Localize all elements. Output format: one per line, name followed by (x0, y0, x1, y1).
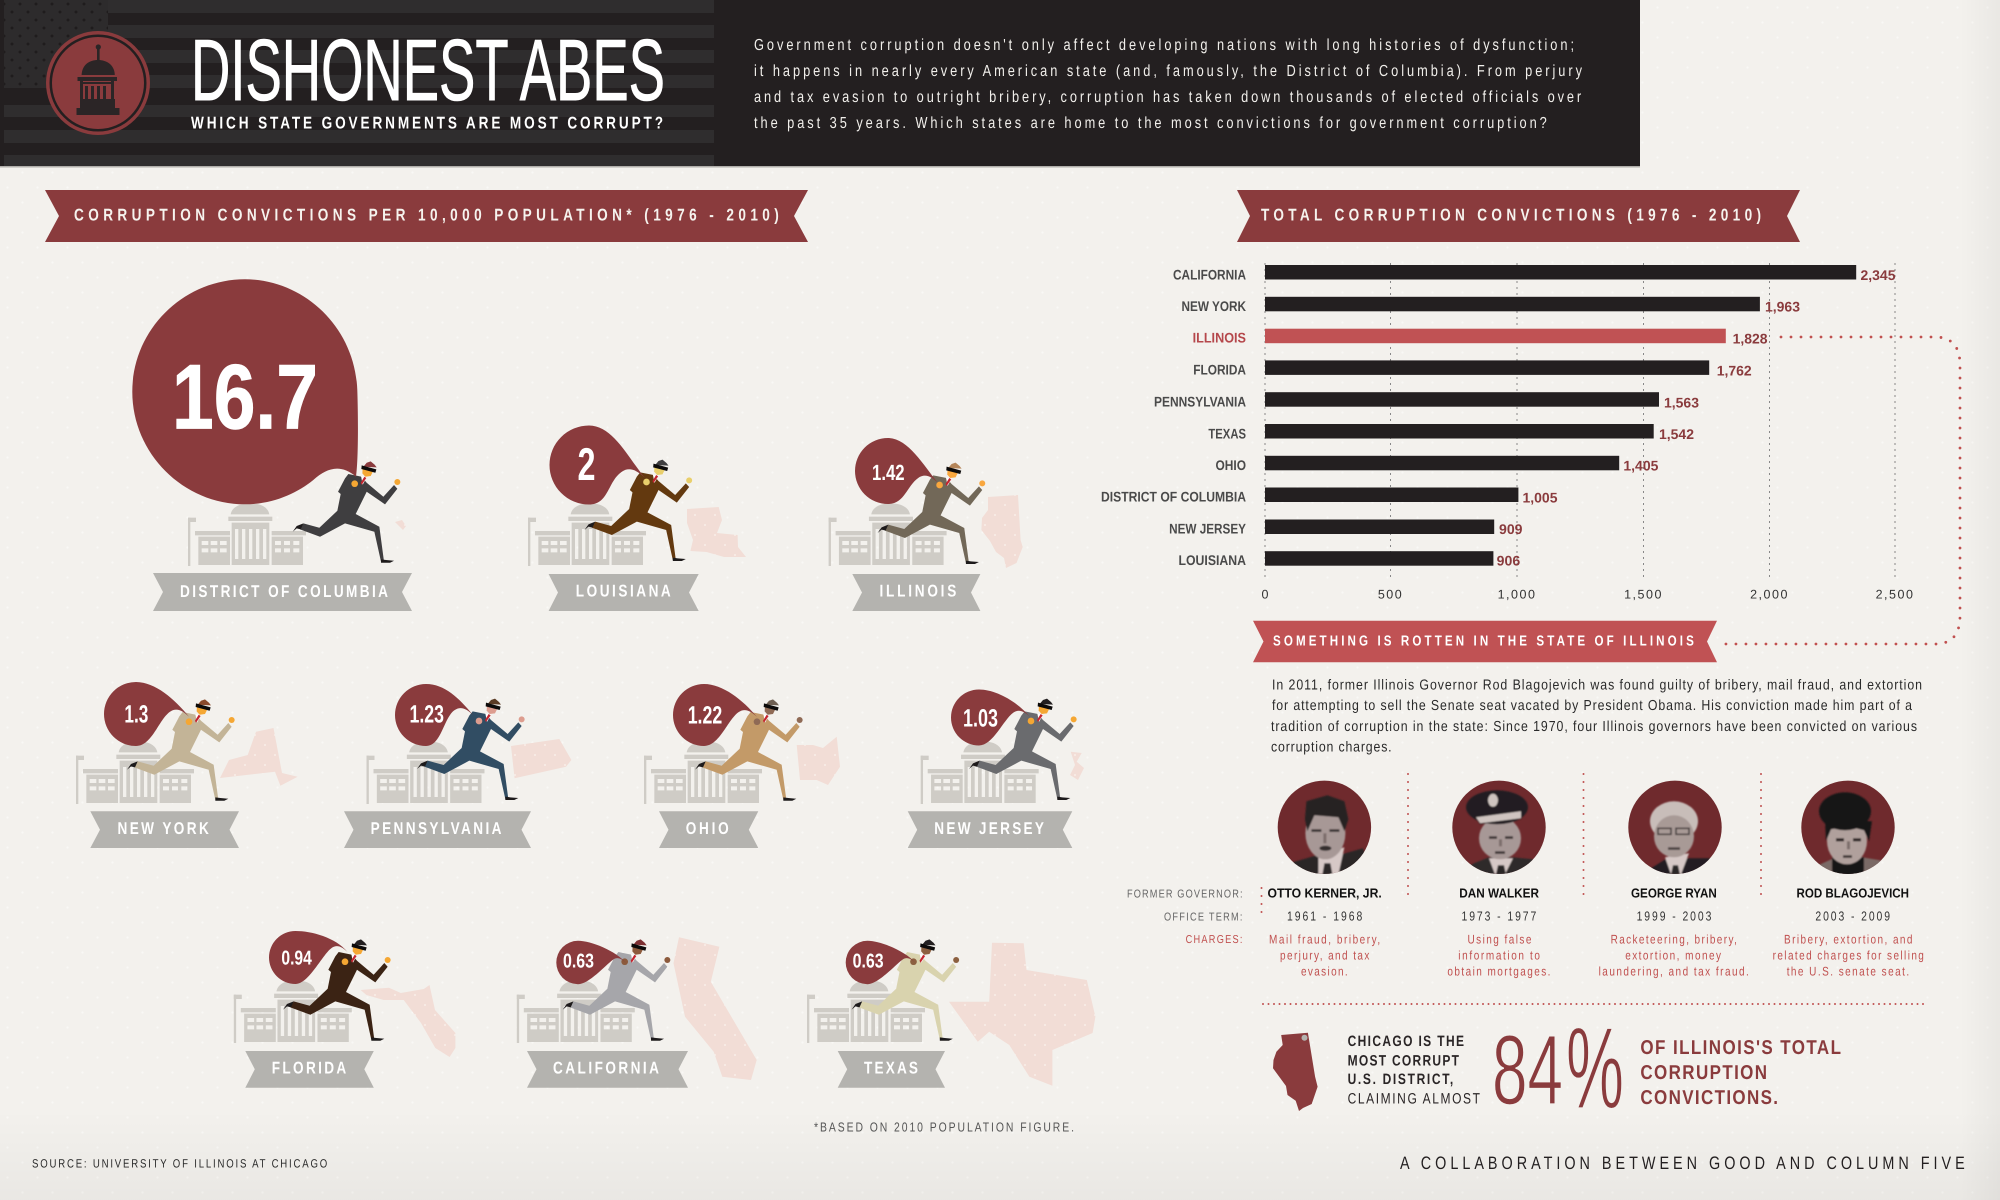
runner (293, 461, 400, 563)
money bag: 16.7 (132, 279, 358, 504)
money bag: 0.63 (846, 941, 915, 984)
category labels: TEXAS (1208, 425, 1246, 441)
value labels: 1,542 (1659, 426, 1694, 442)
label ribbon: DISTRICT OF COLUMBIA (180, 582, 388, 601)
charges (1447, 933, 1550, 979)
charges (1773, 933, 1924, 979)
capitol building (517, 980, 635, 1043)
label ribbon: TEXAS (864, 1058, 918, 1077)
charges: related charges for selling (1773, 949, 1924, 963)
lead-in text: CLAIMING ALMOST (1348, 1090, 1480, 1107)
header band (0, 0, 1640, 168)
label ribbon (344, 811, 531, 848)
bars (1265, 265, 1856, 566)
governor table row labels: FORMER GOVERNOR: (1127, 888, 1243, 900)
arrow: dotted connector from Illinois bar to Illinois section (1716, 337, 1960, 644)
axis labels: 2,500 (1876, 587, 1914, 601)
label ribbon: LOUISIANA (576, 582, 671, 601)
Illinois text block: for attempting to sell the Senate seat vacated by President Obama. His conviction made him part of a (1272, 698, 1913, 714)
state map: Ohio (797, 737, 840, 785)
state map: New Jersey (1070, 752, 1084, 780)
state map: Illinois (981, 495, 1023, 568)
money bag: 1.22 (673, 684, 757, 746)
axis labels: 500 (1378, 587, 1403, 601)
governor table row labels (1127, 888, 1243, 946)
state map: Pennsylvania (511, 739, 571, 778)
label ribbon (852, 574, 980, 611)
category labels: FLORIDA (1193, 362, 1246, 378)
governor table row labels: CHARGES: (1186, 934, 1242, 946)
state map: Texas (949, 943, 1095, 1086)
runner (584, 460, 692, 561)
axis labels: 1,000 (1498, 587, 1536, 601)
capitol building (829, 503, 947, 566)
runner (852, 939, 959, 1041)
closing text: CORRUPTION (1640, 1062, 1767, 1084)
subtitle: WHICH STATE GOVERNMENTS ARE MOST CORRUPT? (191, 113, 663, 132)
big number: 84%: % (1566, 1003, 1624, 1133)
label ribbon (908, 811, 1072, 848)
state map: Florida (361, 985, 455, 1057)
figure: New York (76, 682, 298, 848)
charges: Mail fraud, bribery, (1269, 933, 1380, 947)
capitol building (807, 980, 925, 1043)
runner (878, 463, 985, 564)
category labels: CALIFORNIA (1173, 266, 1246, 282)
category labels: LOUISIANA (1178, 552, 1246, 568)
portrait: George Ryan (1625, 781, 1725, 877)
money bag: 1.03: 1.03 (963, 705, 998, 733)
money bag: 2 (550, 426, 645, 504)
charges: laundering, and tax fraud. (1599, 965, 1749, 979)
money bag: 16.7: 16.7 (172, 346, 318, 448)
bar chart: total convictions (1101, 263, 1914, 601)
money bag: 1.42 (855, 438, 938, 504)
runner (695, 699, 803, 801)
runner (283, 939, 391, 1041)
state map: New York (220, 728, 298, 786)
figure: Ohio (644, 684, 840, 848)
value labels: 1,405 (1623, 458, 1659, 474)
label ribbon (659, 811, 758, 848)
label ribbon: NEW YORK (118, 819, 209, 838)
value labels: 1,563 (1664, 394, 1699, 410)
category labels (1101, 266, 1247, 568)
charges: evasion. (1301, 965, 1348, 979)
closing text: OF ILLINOIS'S TOTAL (1640, 1037, 1841, 1059)
value labels: 909 (1499, 521, 1523, 537)
Illinois text block: In 2011, former Illinois Governor Rod Blagojevich was found guilty of bribery, mail fraud, and extortion (1272, 677, 1922, 693)
credit line: A COLLABORATION BETWEEN GOOD AND COLUMN FIVE (1400, 1153, 1965, 1173)
money bag: 0.63: 0.63 (853, 951, 884, 973)
Illinois text block (1271, 677, 1922, 756)
label ribbon: PENNSYLVANIA (371, 819, 501, 838)
name: OTTO KERNER, JR. (1268, 885, 1382, 900)
category labels: NEW JERSEY (1169, 520, 1247, 536)
divider line (1263, 1003, 1924, 1005)
runner (563, 939, 670, 1041)
governor: Otto Kerner (1268, 781, 1382, 979)
portrait: Otto Kerner (1274, 781, 1374, 877)
value labels (1497, 267, 1896, 569)
figure: Texas (807, 939, 1095, 1088)
charges (1599, 933, 1749, 979)
governor: Dan Walker (1447, 781, 1550, 979)
charges: obtain mortgages. (1447, 965, 1550, 979)
capitol building (76, 741, 194, 804)
governor: George Ryan (1599, 781, 1749, 979)
charges: the U.S. senate seat. (1787, 965, 1909, 979)
state map: Louisiana (687, 507, 746, 557)
capitol building (921, 741, 1039, 804)
money bag: 1.3 (104, 682, 189, 746)
charges: Racketeering, bribery, (1611, 933, 1737, 947)
axis labels: 0 (1262, 587, 1269, 601)
charges: information to (1458, 949, 1540, 963)
state map: California (674, 937, 757, 1080)
name: ROD BLAGOJEVICH (1796, 885, 1909, 900)
Illinois text block: corruption charges. (1271, 740, 1392, 756)
money bag: 1.23 (395, 684, 473, 746)
charges: perjury, and tax (1280, 949, 1370, 963)
money bag: 1.23: 1.23 (410, 700, 444, 728)
ribbon heading: total convictions (1237, 190, 1800, 242)
charges: extortion, money (1625, 949, 1722, 963)
figure: Pennsylvania (344, 684, 571, 848)
intro paragraph: and tax evasion to outright bribery, corruption has taken down thousands of elected officials over (754, 89, 1582, 106)
portrait: Dan Walker (1449, 781, 1549, 877)
axis labels: 1,500 (1624, 587, 1663, 601)
figure: New Jersey (908, 690, 1084, 848)
intro paragraph (754, 37, 1582, 132)
Chicago callout (1273, 1003, 1841, 1133)
money bag: 0.94 (269, 931, 348, 984)
portrait: Rod Blagojevich (1798, 781, 1898, 877)
value labels: 906 (1497, 553, 1520, 569)
capitol building (644, 741, 762, 804)
closing text: CONVICTIONS. (1640, 1087, 1778, 1109)
governor table row labels: OFFICE TERM: (1164, 911, 1242, 923)
value labels: 1,963 (1765, 299, 1800, 315)
value labels: 1,762 (1717, 362, 1752, 378)
figure: Illinois (829, 438, 1023, 611)
category labels: PENNSYLVANIA (1154, 394, 1246, 410)
capitol building (188, 503, 306, 566)
category labels: ILLINOIS (1193, 330, 1246, 346)
label ribbon: OHIO (686, 819, 729, 838)
figure: Florida (234, 931, 455, 1088)
axis labels (1262, 587, 1914, 601)
money bag: 1.42: 1.42 (872, 460, 905, 485)
intro paragraph: Government corruption doesn't only affect developing nations with long histories of dysfunction; (754, 37, 1574, 54)
category labels: OHIO (1216, 457, 1246, 473)
money bag: 0.63 (556, 941, 626, 984)
ribbon heading: total convictions: TOTAL CORRUPTION CONVICTIONS (1976 - 2010) (1261, 206, 1761, 224)
ribbon heading: per capita: CORRUPTION CONVICTIONS PER 10,000 POPULATION* (1976 - 2010) (74, 206, 779, 224)
figure: Louisiana (528, 426, 746, 611)
capitol building (234, 980, 352, 1043)
value labels: 2,345 (1860, 267, 1896, 283)
term: 2003 - 2009 (1815, 908, 1890, 923)
footnote: *BASED ON 2010 POPULATION FIGURE. (814, 1120, 1074, 1135)
charges: Bribery, extortion, and (1784, 933, 1913, 947)
label ribbon (549, 574, 699, 611)
lead-in text (1348, 1033, 1480, 1107)
source: SOURCE: UNIVERSITY OF ILLINOIS AT CHICAGO (32, 1156, 327, 1170)
figure: District of Columbia (132, 279, 412, 611)
term: 1999 - 2003 (1637, 908, 1711, 923)
label ribbon (90, 811, 239, 848)
money bag: 1.3: 1.3 (124, 700, 148, 728)
money bag: 2: 2 (578, 438, 596, 490)
dividers (1262, 774, 1761, 918)
axis labels: 2,000 (1750, 587, 1789, 601)
term: 1973 - 1977 (1462, 908, 1536, 923)
label ribbon (245, 1051, 374, 1088)
figure: California (517, 937, 757, 1088)
category labels: NEW YORK (1182, 298, 1246, 314)
ribbon heading: Illinois: SOMETHING IS ROTTEN IN THE STATE OF ILLINOIS (1273, 634, 1694, 650)
capitol building (366, 741, 484, 804)
closing text (1640, 1037, 1841, 1109)
flag background (4, 0, 714, 166)
icon: Illinois map (1273, 1033, 1318, 1111)
lead-in text: CHICAGO IS THE (1348, 1033, 1464, 1050)
intro paragraph: it happens in nearly every American state (and, famously, the District of Columbia). From perjury (754, 63, 1582, 80)
term: 1961 - 1968 (1287, 908, 1362, 923)
charges: Using false (1468, 933, 1531, 947)
value labels: 1,828 (1733, 330, 1768, 346)
runner (127, 699, 235, 801)
runner (417, 699, 525, 800)
governor: Rod Blagojevich (1773, 781, 1924, 979)
name: GEORGE RYAN (1631, 885, 1717, 900)
money bag: 1.22: 1.22 (688, 701, 722, 729)
charges (1269, 933, 1380, 979)
label ribbon: ILLINOIS (880, 582, 956, 601)
category labels: DISTRICT OF COLUMBIA (1101, 489, 1246, 505)
icon: capitol seal (46, 31, 150, 135)
lead-in text: U.S. DISTRICT, (1348, 1071, 1453, 1088)
money bag: 1.03 (951, 690, 1030, 746)
lead-in text: MOST CORRUPT (1348, 1052, 1459, 1069)
capitol building (528, 503, 646, 566)
ribbon heading: per capita (45, 190, 808, 242)
runner (969, 699, 1077, 800)
intro paragraph: the past 35 years. Which states are home to the most convictions for government corruption? (754, 115, 1547, 132)
label ribbon (838, 1051, 945, 1088)
value labels: 1,005 (1522, 489, 1558, 505)
ribbon heading: Illinois (1253, 621, 1717, 662)
Illinois text block: tradition of corruption in the state: Since 1970, four Illinois governors have been convicted on various (1271, 719, 1917, 735)
name: DAN WALKER (1459, 885, 1540, 900)
state map: DC (395, 520, 406, 530)
label ribbon (527, 1051, 688, 1088)
big number: 84%: 84 (1492, 1014, 1563, 1125)
money bag: 0.63: 0.63 (563, 951, 594, 973)
label ribbon: CALIFORNIA (553, 1058, 659, 1077)
money bag: 0.94: 0.94 (281, 947, 312, 969)
title: DISHONEST ABES (191, 22, 665, 119)
label ribbon: NEW JERSEY (934, 819, 1045, 838)
label ribbon: FLORIDA (272, 1058, 346, 1077)
label ribbon (153, 573, 412, 611)
